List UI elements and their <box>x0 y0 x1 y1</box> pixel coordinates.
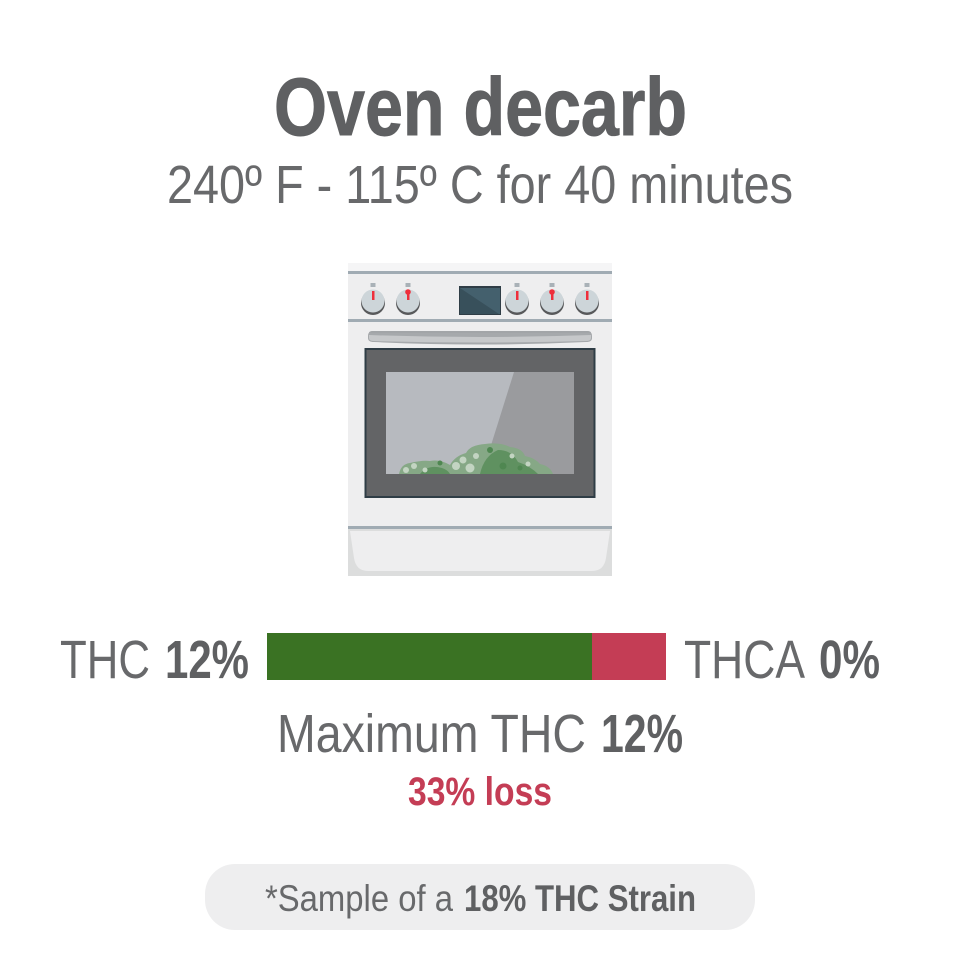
oven base drawer <box>348 529 612 576</box>
label: Maximum THC 12%: Maximum THC <box>277 704 586 764</box>
bar: THC vs THCA <box>267 633 666 680</box>
sample note pill: *Sample of a <box>265 878 453 919</box>
label: 33% loss: 33% loss <box>408 770 552 814</box>
subtitle: 240º F - 115º C for 40 minutes <box>167 155 793 215</box>
oven display <box>459 286 501 315</box>
label: THC 12%: THC <box>60 630 150 690</box>
oven handle <box>368 331 592 344</box>
title: Oven decarb <box>274 62 687 153</box>
cannabis buds <box>399 443 553 474</box>
label: THCA 0%: THCA <box>684 630 805 690</box>
sample note pill <box>205 864 755 930</box>
control knobs <box>361 283 599 315</box>
label: THC 12%: 12% <box>165 630 249 690</box>
oven window <box>386 372 574 474</box>
icon: oven <box>348 263 612 576</box>
oven door <box>364 348 596 498</box>
label: Maximum THC 12%: 12% <box>601 704 683 764</box>
label: THCA 0%: 0% <box>819 630 880 690</box>
sample note pill: 18% THC Strain <box>464 878 696 919</box>
